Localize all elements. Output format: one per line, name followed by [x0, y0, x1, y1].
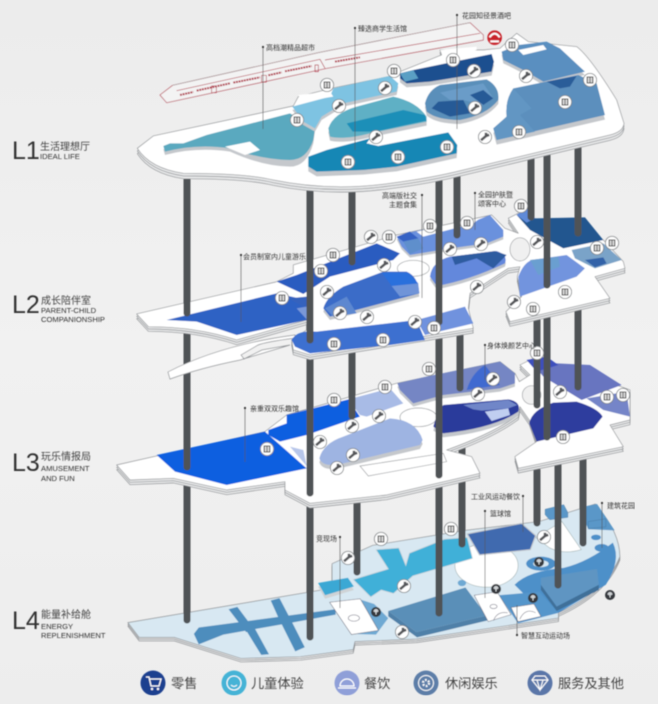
callout labels: 建筑花园	[607, 501, 635, 510]
pillars from L2 to L3	[187, 300, 578, 493]
L4 sports courts	[330, 592, 541, 635]
callout labels: 会员制室内儿童游乐	[243, 252, 306, 261]
legend: leisure	[414, 670, 498, 696]
L4 water garden	[351, 504, 616, 635]
L1 blue front block	[308, 137, 457, 176]
panel: L2 floor plan	[137, 208, 625, 360]
L2 hole outlines	[510, 238, 530, 261]
L2 upper right block	[517, 208, 603, 248]
level label L3: 玩乐情报局	[41, 450, 91, 463]
L2 top band	[397, 218, 503, 258]
level label L4: ENERGY	[41, 622, 73, 631]
level label L3	[12, 449, 91, 483]
level label L2: L2	[12, 291, 40, 319]
callout labels: 颂客中心	[478, 199, 506, 208]
L3 hole outlines	[360, 408, 447, 476]
legend: retail	[140, 670, 197, 696]
L4 big block	[388, 588, 487, 632]
L1 navy band	[400, 58, 494, 87]
level label L2: 成长陪伴室	[41, 294, 91, 307]
legend: children: 儿童体验	[251, 675, 304, 691]
level label L1	[12, 137, 90, 165]
legend: services: 服务及其他	[558, 676, 624, 691]
L2 far right block	[572, 243, 622, 268]
level label L1: L1	[12, 137, 40, 165]
dining marker icons	[313, 64, 567, 639]
level label L4: 能量补给舱	[41, 608, 91, 621]
L1 center oval	[425, 83, 498, 124]
L2 left oval	[323, 275, 419, 320]
L3 right blocks	[537, 363, 622, 400]
callout labels: 主题食集	[389, 200, 417, 209]
callout labels: 工业风运动餐饮	[471, 492, 520, 501]
L4 top boxes	[545, 505, 606, 529]
callout labels: 竞现场	[316, 534, 337, 543]
legend: leisure: 休闲娱乐	[445, 676, 498, 691]
L1 upper right block	[502, 45, 585, 85]
callout labels: 臻选商学生活馆	[358, 24, 407, 33]
level label L2: COMPANIONSHIP	[41, 315, 105, 324]
pillars from L3 to L4	[187, 445, 583, 637]
level label L1: IDEAL LIFE	[40, 152, 80, 161]
legend: dining	[334, 670, 390, 696]
L3 navy oval	[433, 403, 519, 437]
callout leader lines	[240, 14, 603, 636]
legend: services	[528, 670, 624, 696]
callout labels: 亲重双双乐趣馆	[250, 404, 299, 413]
L2 right oval	[430, 254, 506, 289]
callout labels: 智慧互动运动场	[521, 631, 570, 640]
L2 bottom strip	[292, 320, 425, 353]
level label L4: L4	[12, 607, 40, 635]
L4 corridors	[194, 598, 336, 655]
rail station outline	[160, 23, 483, 103]
legend: retail: 零售	[171, 676, 197, 691]
L3 amusement zone	[157, 432, 307, 485]
panel: L4 floor plan	[128, 504, 620, 662]
level label L3: AND FUN	[41, 474, 75, 483]
L4 central white courtyards	[455, 522, 581, 587]
panel: L3 floor plan	[117, 357, 630, 508]
L4 right block	[541, 585, 599, 611]
legend: children	[222, 670, 304, 696]
L3 upper band	[397, 365, 515, 407]
L1 teal retail hall	[163, 117, 315, 167]
L3 dining oval	[319, 422, 423, 469]
callout labels	[243, 11, 635, 640]
L4 navy retail block	[467, 523, 536, 555]
callout labels: 高档潮精品超市	[266, 43, 315, 52]
callout labels: 篮球馆	[490, 509, 511, 518]
pillars from L1 to L2	[187, 140, 578, 340]
level label L2	[12, 291, 105, 324]
L2 mid right block	[518, 255, 585, 297]
callout labels: 花园知径景酒吧	[462, 11, 511, 20]
legend: dining: 餐饮	[364, 676, 390, 691]
level label L1: 生活理想厅	[40, 140, 90, 153]
callout labels: 身体焕颜艺中心	[487, 341, 536, 350]
L1 teal oval	[328, 101, 427, 142]
level label L4: REPLENISHMENT	[41, 631, 106, 640]
level label L4	[12, 607, 106, 640]
level label L3: AMUSEMENT	[41, 464, 90, 473]
level label L3: L3	[12, 449, 40, 477]
callout labels: 高端版社交	[382, 191, 417, 200]
L1 large right block	[493, 80, 605, 145]
metro logo	[487, 30, 502, 45]
L1 light blue block	[292, 79, 398, 132]
L2 children zone	[167, 293, 307, 335]
level label L2: PARENT-CHILD	[41, 306, 97, 315]
shop marker icons	[260, 38, 630, 546]
panel: L1 floor plan	[137, 23, 624, 192]
L4 cyan children zone	[353, 537, 472, 597]
callout labels: 全园护肤暨	[478, 190, 513, 199]
dark service marker icons	[371, 557, 615, 617]
curved walkway below L2	[168, 335, 295, 379]
legend	[140, 670, 624, 696]
